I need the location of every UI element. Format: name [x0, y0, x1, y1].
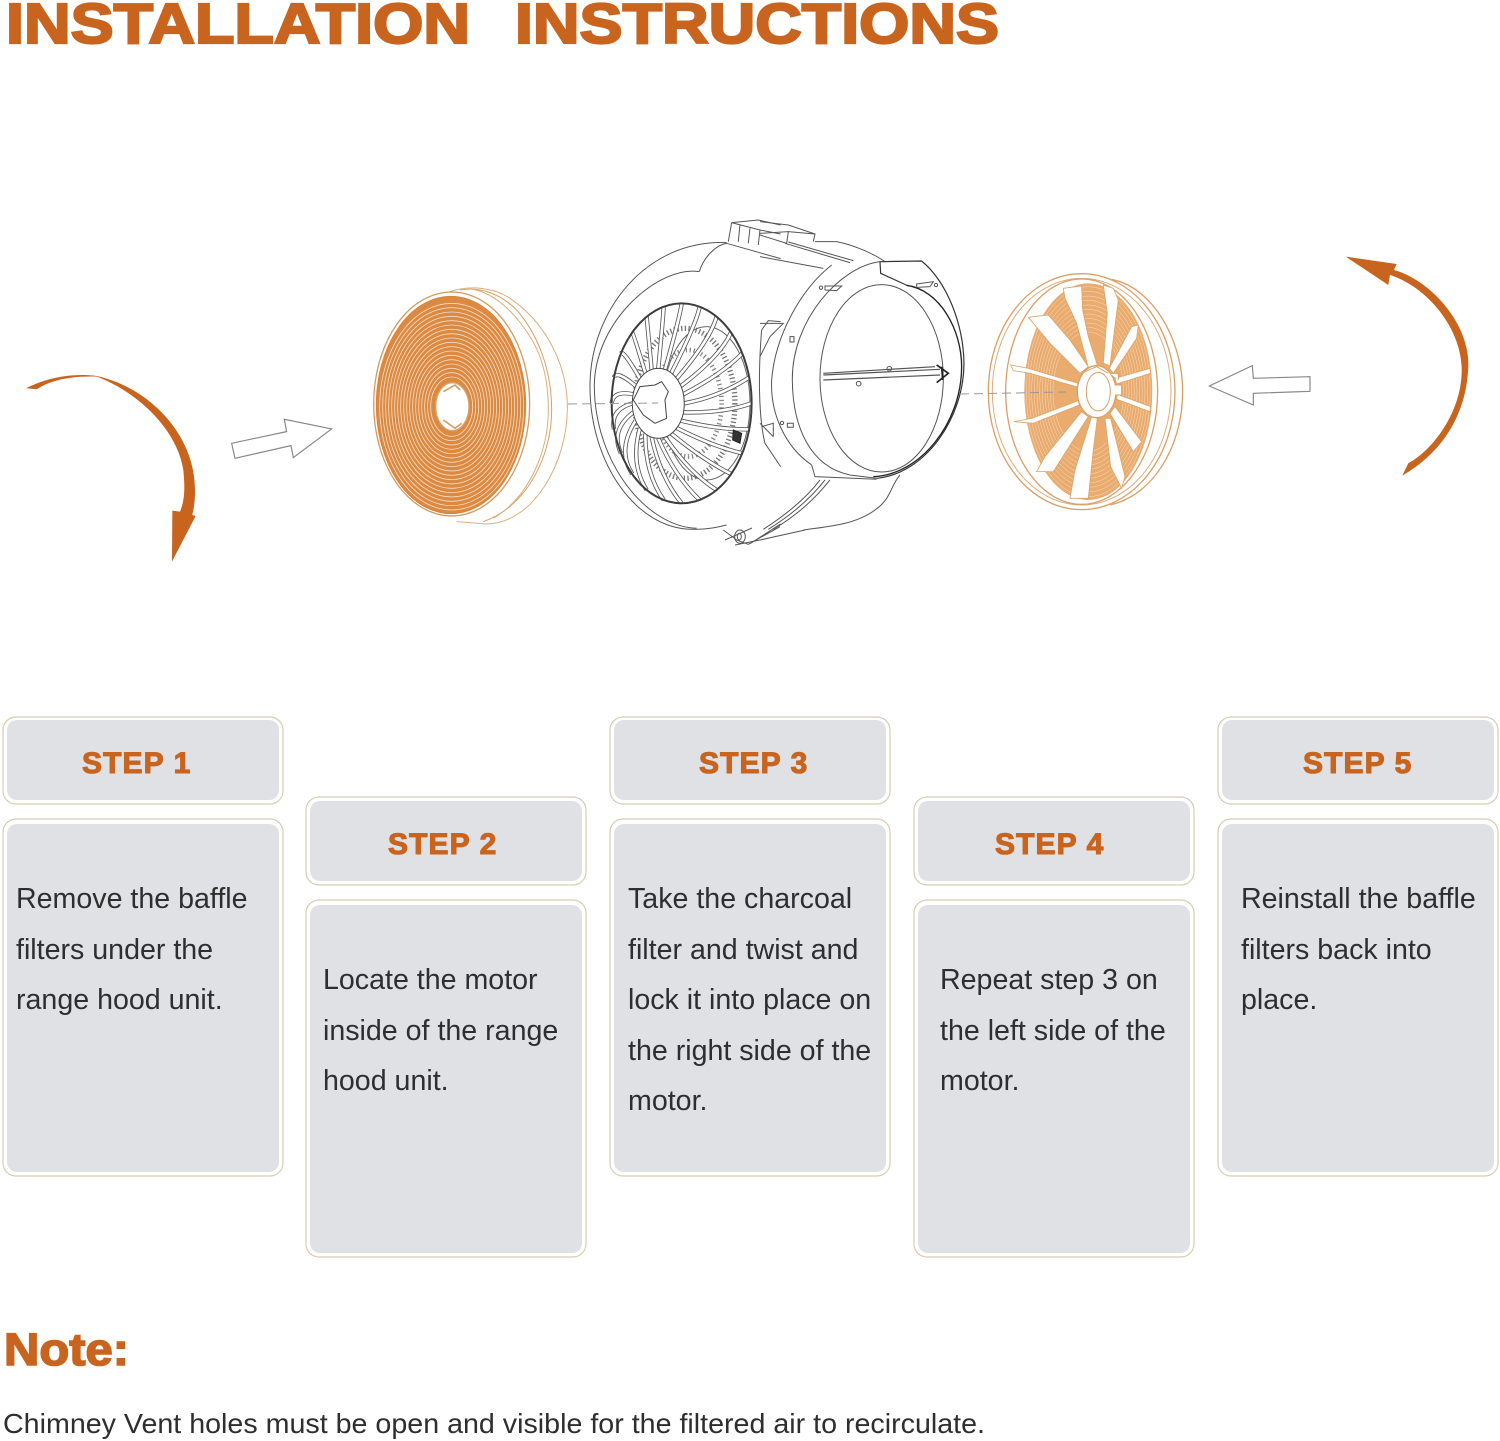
panel: step 4 [914, 797, 1194, 1257]
step 3 header [610, 717, 890, 804]
note heading: Note: [4, 1324, 129, 1375]
dashed axis lines [568, 392, 1066, 404]
step 5 body [1218, 819, 1498, 1176]
step 1 header [3, 717, 283, 804]
step 5 body: filters back into [1241, 934, 1432, 966]
panel: step 2 [306, 797, 586, 1257]
motor blower housing [590, 220, 964, 545]
motor: body bottom link [725, 528, 805, 545]
step 3 body: Take the charcoal [628, 883, 852, 915]
step 5 header [1218, 717, 1498, 804]
step 3 body: the right side of the [628, 1035, 871, 1067]
step 4 header [914, 797, 1194, 885]
left charcoal filter [374, 288, 567, 524]
step 4 body [914, 900, 1194, 1257]
step 5 body: place. [1241, 984, 1317, 1016]
step 2 body [306, 900, 586, 1257]
step 3 body: filter and twist and [628, 934, 858, 966]
step 1 body [3, 819, 283, 1176]
step 1 body: range hood unit. [16, 984, 223, 1016]
arrow: left curved orange arrow [26, 375, 196, 562]
step 5 header: STEP 5 [1303, 747, 1412, 780]
motor: fan side [590, 220, 781, 544]
step 1 body: filters under the [16, 934, 213, 966]
step 3 body [610, 819, 890, 1176]
step 4 header: STEP 4 [995, 828, 1104, 861]
step 1 header: STEP 1 [82, 747, 191, 780]
step 2 body: Locate the motor [323, 964, 538, 996]
step 2 header [306, 797, 586, 885]
arrow: right curved orange arrow [1346, 257, 1468, 476]
step 2 body: hood unit. [323, 1065, 449, 1097]
panel: step 3 [610, 717, 890, 1176]
step 3 body: lock it into place on [628, 984, 871, 1016]
step 4 body: the left side of the [940, 1015, 1166, 1047]
step 3 header: STEP 3 [699, 747, 808, 780]
step 2 header: STEP 2 [388, 828, 497, 861]
note text: Chimney Vent holes must be open and visible for the filtered air to recirculate. [3, 1408, 985, 1439]
step 3 body: motor. [628, 1085, 707, 1117]
title [6, 0, 999, 56]
step 1 body: Remove the baffle [16, 883, 248, 915]
step 4 body: Repeat step 3 on [940, 964, 1158, 996]
arrow: left outline arrow [232, 419, 332, 458]
motor: outlet ring side [760, 222, 964, 530]
step 4 body: motor. [940, 1065, 1019, 1097]
panel: step 5 [1218, 717, 1498, 1176]
step 2 body: inside of the range [323, 1015, 558, 1047]
arrow: right outline arrow [1209, 366, 1310, 405]
right charcoal filter [988, 274, 1183, 510]
panel: step 1 [3, 717, 283, 1176]
step 5 body: Reinstall the baffle [1241, 883, 1476, 915]
